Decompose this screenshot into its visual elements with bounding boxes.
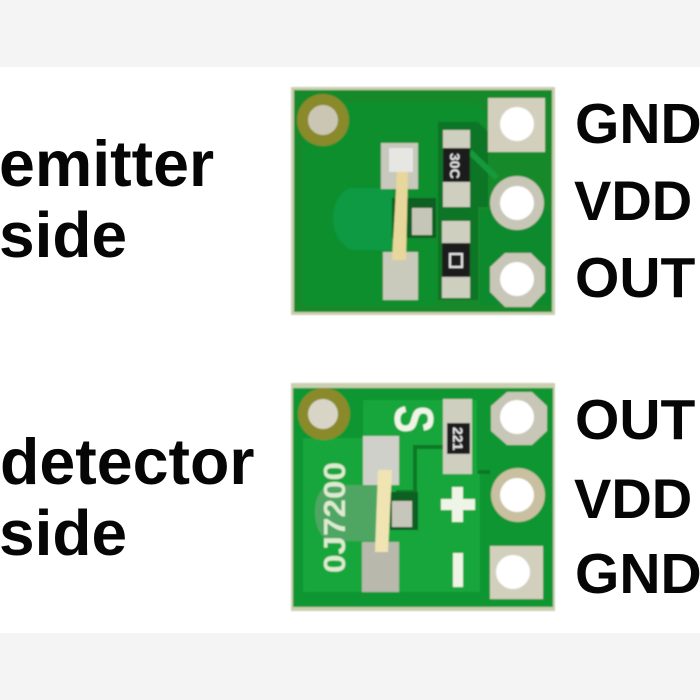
copper pour xyxy=(303,400,480,592)
top solder pad xyxy=(381,143,418,189)
bottom solder pad xyxy=(383,252,418,300)
jumper wire xyxy=(392,172,408,260)
through-hole pad GND xyxy=(490,546,543,599)
board substrate xyxy=(291,87,555,315)
top solder pad xyxy=(363,436,399,485)
heading: detector side: detector xyxy=(0,426,254,498)
board substrate xyxy=(291,383,555,611)
pin labels: detector side: GND xyxy=(575,542,700,606)
mounting pad xyxy=(297,94,349,146)
emitter side circuit board xyxy=(291,87,555,315)
heading: emitter side xyxy=(0,128,214,271)
heading: detector side xyxy=(0,426,254,569)
through-hole pad OUT xyxy=(491,392,547,445)
resistor 221 xyxy=(443,399,472,474)
resistor 30C: 30C xyxy=(447,153,463,179)
detector body xyxy=(315,485,378,541)
pin labels: emitter side xyxy=(574,92,700,310)
resistor 30C xyxy=(443,130,470,207)
heading: detector side: side xyxy=(0,497,127,569)
pin labels: detector side: VDD xyxy=(574,467,692,530)
silkscreen S: S xyxy=(383,405,445,433)
pin labels: detector side xyxy=(574,388,700,606)
silkscreen minus xyxy=(453,553,463,587)
copper pour xyxy=(303,103,490,305)
through-hole pad OUT xyxy=(490,253,545,307)
through-hole pad GND xyxy=(488,98,545,152)
middle solder pad xyxy=(412,208,432,235)
through-hole pad VDD xyxy=(491,468,545,522)
bottom solder pad xyxy=(362,542,399,592)
silkscreen label 0J7200: 0J7200 xyxy=(317,462,352,573)
dark trace xyxy=(396,447,490,492)
dark pad surround xyxy=(390,492,418,530)
resistor 0 xyxy=(442,221,470,298)
detector side circuit board xyxy=(291,383,555,611)
top grey band xyxy=(0,0,700,67)
dark trace area xyxy=(438,122,488,300)
mounting pad xyxy=(298,388,350,440)
pin labels: emitter side: GND xyxy=(575,92,700,156)
heading: emitter side: side xyxy=(0,199,127,271)
heading: emitter side: emitter xyxy=(0,128,214,200)
middle solder pad xyxy=(392,501,412,527)
silkscreen plus xyxy=(441,487,475,522)
resistor 221: 221 xyxy=(450,427,466,451)
pin labels: emitter side: OUT xyxy=(575,246,696,310)
through-hole pad VDD xyxy=(490,176,544,230)
pin labels: emitter side: VDD xyxy=(574,169,692,232)
bottom grey band xyxy=(0,633,700,700)
LED body xyxy=(333,188,393,250)
pin labels: detector side: OUT xyxy=(575,388,696,452)
jumper wire xyxy=(375,470,392,552)
